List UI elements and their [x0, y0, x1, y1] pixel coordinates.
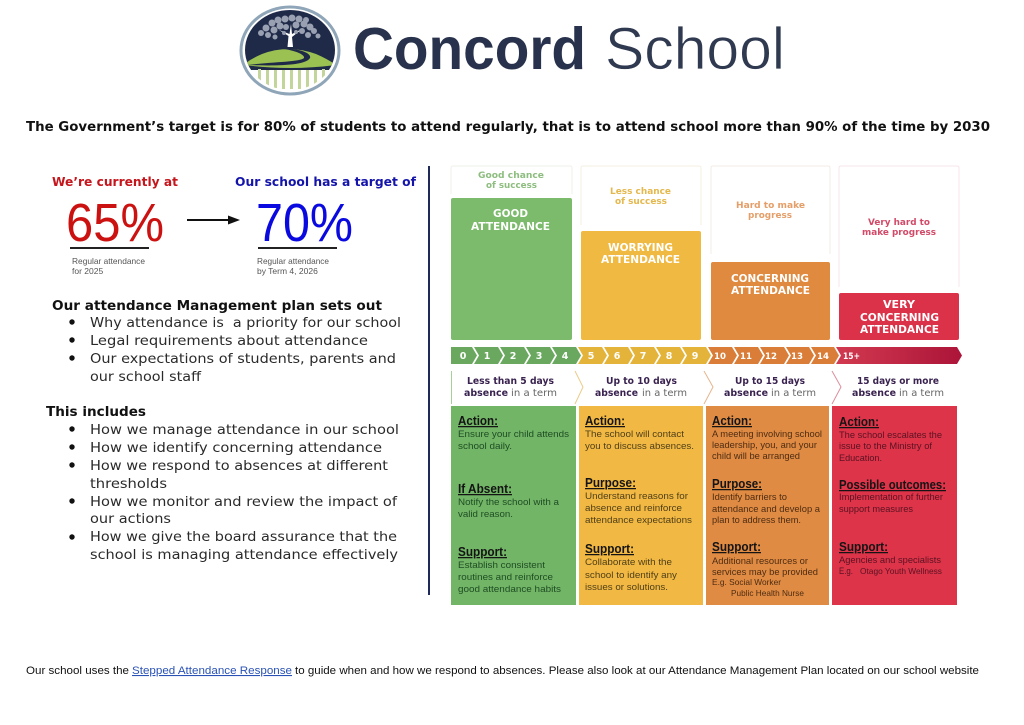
panel: red actions: Agencies and specialists	[839, 555, 941, 566]
absence thresholds row: Up to 10 days	[606, 376, 677, 387]
column: concerning attendance: CONCERNING	[731, 273, 809, 285]
panel: green actions: good attendance habits	[458, 584, 561, 595]
panel: red actions: Support:	[839, 540, 888, 554]
panel: green actions: Establish consistent	[458, 560, 545, 571]
column: very concerning attendance: ATTENDANCE	[860, 324, 939, 336]
panel: yellow actions: Support:	[585, 542, 634, 556]
column: good attendance: of success	[486, 181, 537, 191]
chevron scale of days absent: 2	[510, 351, 516, 362]
chevron scale of days absent: 15+	[843, 352, 860, 362]
text block: attendance management plan: Why attendance is a priority for our school	[90, 315, 401, 331]
text block: this includes: How we give the board assurance that the	[90, 529, 397, 545]
panel: yellow actions: school to identify any	[585, 570, 677, 581]
panel: yellow actions: Purpose:	[585, 476, 636, 490]
column: very concerning attendance	[839, 166, 959, 340]
column: concerning attendance: progress	[748, 211, 792, 221]
column: good attendance: ATTENDANCE	[471, 221, 550, 233]
chevron scale of days absent: 13	[791, 352, 803, 362]
column: worrying attendance	[581, 166, 701, 340]
absence thresholds row: in a term	[771, 388, 816, 399]
column: very concerning attendance: Very hard to	[868, 218, 930, 228]
chevron scale of days absent: 14	[817, 352, 829, 362]
icon: school crest	[240, 7, 340, 96]
text block: attendance management plan: Our expectations of students, parents and	[90, 351, 396, 367]
column: worrying attendance: Less chance	[610, 187, 671, 197]
panel: orange actions: Action:	[712, 414, 752, 428]
column: very concerning attendance: make progress	[862, 228, 936, 238]
stat: 70%: 70%	[256, 193, 353, 253]
arrow	[187, 216, 240, 224]
panel: current and target attendance	[52, 174, 417, 276]
text block: this includes: How we identify concerning attendance	[90, 440, 382, 456]
chevron scale of days absent: 4	[562, 351, 569, 362]
panel: green actions: Notify the school with a	[458, 497, 560, 508]
panel: attendance columns	[451, 166, 959, 340]
column: concerning attendance	[711, 166, 830, 340]
caption: 2026: Regular attendance	[257, 256, 329, 266]
panel: orange actions: Public Health Nurse	[731, 588, 804, 598]
panel: orange actions: attendance and develop a	[712, 504, 821, 515]
chevron scale of days absent: 0	[460, 351, 467, 362]
column: worrying attendance: of success	[615, 197, 667, 207]
panel: green actions: Action:	[458, 414, 498, 428]
chevron scale of days absent: 12	[765, 352, 777, 362]
column: concerning attendance: Hard to make	[736, 201, 805, 211]
panel: orange actions: child will be arranged	[712, 451, 800, 462]
text block: this includes: How we monitor and review the impact of	[90, 494, 398, 510]
panel: red actions: Otago Youth Wellness	[860, 566, 942, 576]
panel: red actions: Action:	[839, 415, 879, 429]
wordmark: Concord	[353, 16, 586, 82]
panel: yellow actions: Action:	[585, 414, 625, 428]
footer note: Our school uses the	[26, 665, 129, 677]
footer note: to guide when and how we respond to absences. Please also look at our Attendance Management Plan located on our school website	[295, 665, 979, 677]
panel: green actions: routines and reinforce	[458, 572, 553, 583]
text block: attendance management plan	[52, 298, 401, 385]
text block: attendance management plan: Our attendance Management plan sets out	[52, 298, 383, 314]
panel: red actions: Implementation of further	[839, 492, 943, 503]
text block: this includes: How we respond to absences at different	[90, 458, 388, 474]
text block: this includes: How we manage attendance in our school	[90, 422, 399, 438]
column: concerning attendance: ATTENDANCE	[731, 285, 810, 297]
panel: yellow actions: Collaborate with the	[585, 557, 672, 568]
panel: red actions	[832, 406, 957, 605]
absence thresholds row: Less than 5 days	[467, 376, 554, 387]
absence thresholds row: in a term	[899, 388, 944, 399]
panel: red actions: issue to the Ministry of	[839, 441, 932, 452]
panel: red actions: The school escalates the	[839, 430, 942, 441]
panel: yellow actions: absence and reinforce	[585, 503, 682, 514]
absence thresholds row: Up to 15 days	[735, 376, 805, 387]
chevron scale of days absent: 5	[588, 351, 594, 362]
absence thresholds row	[452, 371, 944, 404]
caption: 2026: by Term 4, 2026	[257, 266, 318, 276]
column: good attendance: GOOD	[493, 208, 528, 220]
panel: red actions: E.g.	[839, 566, 853, 577]
chevron scale of days absent: 1	[484, 351, 490, 362]
chevron scale of days absent: 3	[536, 351, 542, 362]
column: very concerning attendance: CONCERNING	[860, 312, 939, 324]
panel: orange actions: A meeting involving school	[712, 429, 822, 440]
panel: green actions	[451, 406, 576, 605]
panel: orange actions: Purpose:	[712, 477, 762, 491]
footer note: Stepped Attendance Response	[132, 665, 292, 677]
text block: this includes: our actions	[90, 511, 171, 527]
text block: this includes: school is managing attendance effectively	[90, 547, 398, 563]
panel: green actions: Support:	[458, 545, 507, 559]
panel: orange actions: Additional resources or	[712, 556, 808, 567]
panel: green actions: valid reason.	[458, 509, 513, 520]
absence thresholds row: in a term	[642, 388, 687, 399]
chevron scale of days absent: 6	[614, 351, 621, 362]
absence thresholds row: absence	[595, 388, 638, 399]
panel: yellow actions: attendance expectations	[585, 515, 692, 526]
text block: attendance management plan: our school staff	[90, 369, 202, 385]
absence thresholds row: absence	[724, 388, 768, 399]
absence thresholds row: 15 days or more	[857, 376, 939, 387]
panel: orange actions: E.g. Social Worker	[712, 577, 781, 587]
title: The Government’s target is for 80% of students to attend regularly, that is to attend school more than 90% of the time by 2030	[26, 119, 990, 135]
panel: yellow actions: issues or solutions.	[585, 582, 668, 593]
text block: this includes: thresholds	[90, 476, 167, 492]
label: currently at: We’re currently at	[52, 174, 178, 189]
chevron scale of days absent	[451, 347, 962, 364]
stat: 65%: 65%	[66, 193, 164, 253]
text block: attendance management plan: Legal requirements about attendance	[90, 333, 368, 349]
panel: orange actions: services may be provided	[712, 567, 818, 578]
panel: yellow actions: Understand reasons for	[585, 491, 688, 502]
logo	[240, 7, 785, 96]
panel: yellow actions: The school will contact	[585, 429, 684, 440]
column: good attendance: Good chance	[478, 171, 544, 181]
chevron scale of days absent: 7	[640, 351, 646, 362]
chevron scale of days absent: 8	[666, 351, 673, 362]
panel: green actions: Ensure your child attends	[458, 429, 569, 440]
wordmark: School	[605, 16, 785, 82]
column: worrying attendance: WORRYING	[608, 242, 673, 254]
absence thresholds row: absence	[464, 388, 508, 399]
absence thresholds row: absence	[852, 388, 896, 399]
column: worrying attendance: ATTENDANCE	[601, 254, 680, 266]
panel: red actions: Possible outcomes:	[839, 478, 946, 492]
chevron scale of days absent: 9	[692, 351, 698, 362]
text block: this includes: This includes	[46, 404, 146, 420]
panel: orange actions: plan to address them.	[712, 515, 801, 526]
panel: green actions: school daily.	[458, 441, 512, 452]
panel: orange actions: Identify barriers to	[712, 492, 787, 503]
panel: green actions: If Absent:	[458, 482, 512, 496]
panel: yellow actions	[579, 406, 703, 605]
panel: red actions: support measures	[839, 504, 913, 515]
panel: orange actions: leadership, you, and your	[712, 440, 817, 451]
panel: orange actions	[706, 406, 829, 605]
column: very concerning attendance: VERY	[883, 299, 915, 311]
text block: this includes	[46, 404, 399, 563]
caption: 2025: Regular attendance	[72, 256, 145, 266]
panel: yellow actions: you to discuss absences.	[585, 441, 694, 452]
chevron scale of days absent: 10	[714, 352, 726, 362]
panel: orange actions: Support:	[712, 540, 761, 554]
absence thresholds row: in a term	[511, 388, 557, 399]
chevron scale of days absent: 11	[740, 352, 752, 362]
column: good attendance	[451, 166, 572, 340]
panel: red actions: Education.	[839, 453, 882, 464]
wordmark	[353, 16, 785, 82]
caption: 2025: for 2025	[72, 266, 103, 276]
label: school target: Our school has a target of	[235, 174, 417, 189]
